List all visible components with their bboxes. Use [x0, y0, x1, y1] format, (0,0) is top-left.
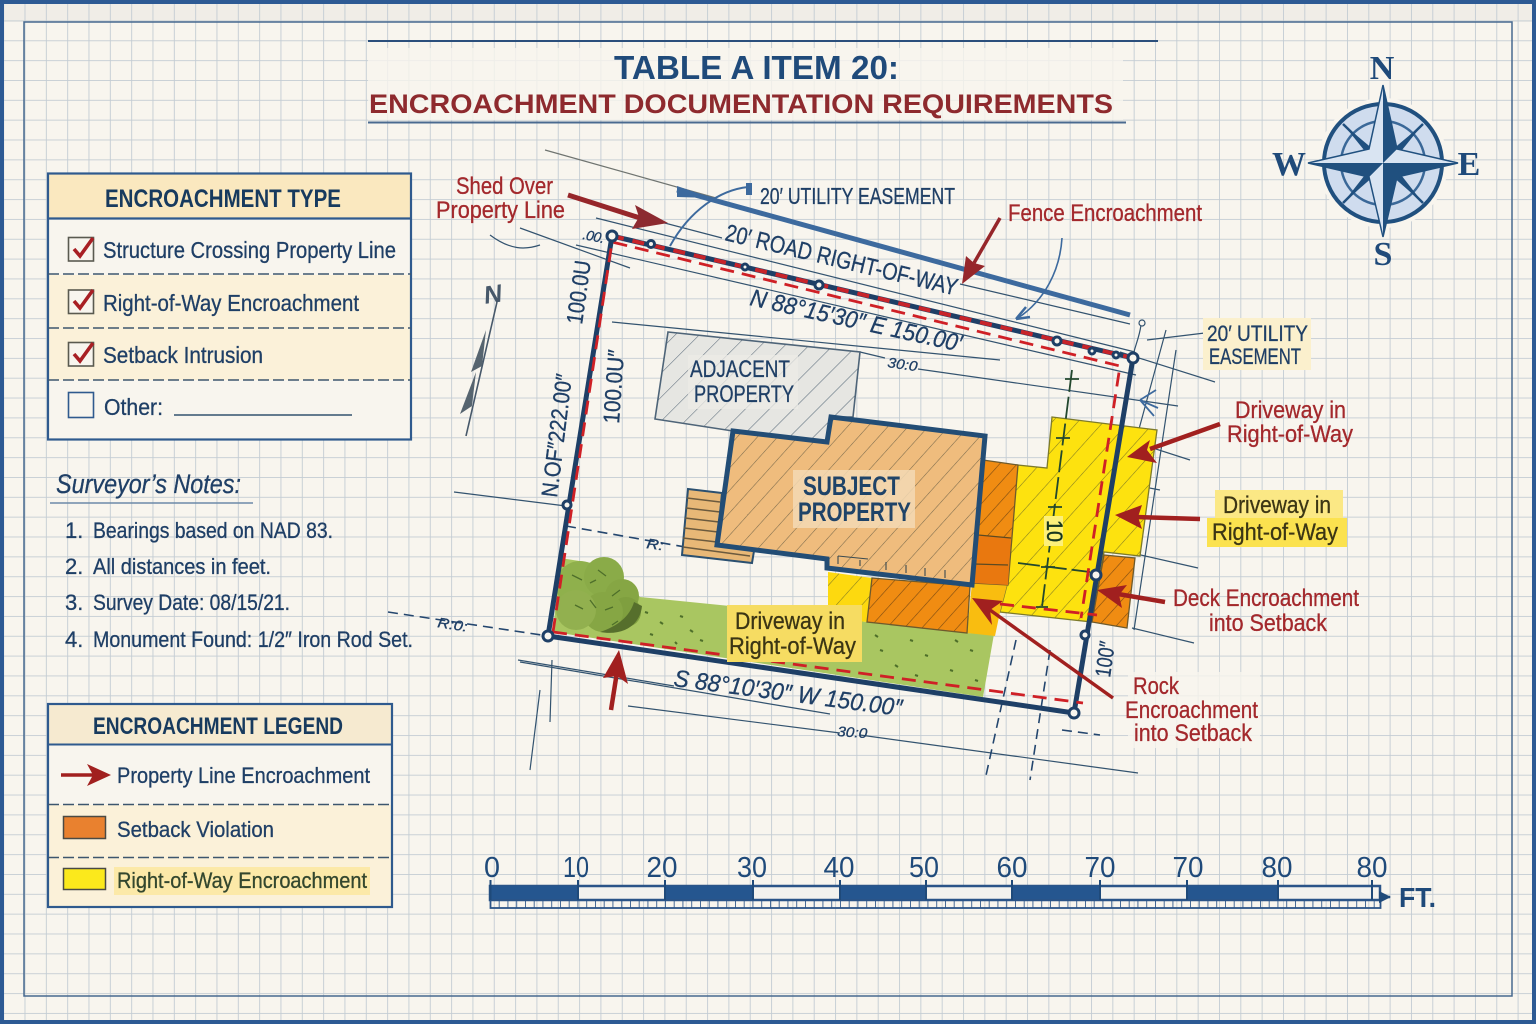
surveyor's notes: 1. [65, 518, 83, 543]
label: 30 top: 30:0 [887, 354, 919, 374]
label: R mid: R: [646, 535, 665, 553]
compass letters: W [1272, 146, 1306, 183]
legend: setback violation [64, 816, 274, 842]
utility easement band [670, 183, 1158, 416]
row: other [68, 392, 352, 420]
compass letters: E [1458, 146, 1480, 183]
compass letters: N [1370, 50, 1395, 87]
adjacent property: PROPERTY [694, 381, 794, 408]
callout: driveway in right-of-way lawn: Right-of-Way [729, 633, 856, 660]
row: structure crossing: Structure Crossing Property Line [103, 237, 396, 263]
scale numbers [484, 852, 1388, 884]
scale bar [484, 852, 1436, 913]
arrow: lawn boundary [603, 650, 628, 710]
dimension labels: 100.0U [561, 259, 596, 326]
callout: driveway in right-of-way yellow: Driveway in [1223, 492, 1331, 519]
callout: shed over property line [436, 173, 668, 229]
surveyor's notes: Monument Found: 1/2″ Iron Rod Set. [93, 627, 413, 652]
callout: driveway in right-of-way lawn: Driveway in [735, 608, 845, 635]
callout: rock encroachment: Encroachment [1125, 697, 1258, 724]
callout: deck encroachment: into Setback [1209, 610, 1328, 637]
dimension labels: 100.0U″ [598, 349, 629, 424]
surveyor's notes: Bearings based on NAD 83. [93, 518, 333, 543]
label: 00 dimension: .00. [581, 226, 606, 246]
dimension labels [536, 220, 1120, 722]
callout: rock encroachment: Rock [1133, 673, 1180, 700]
surveyor's notes: All distances in feet. [93, 554, 271, 579]
surveyor's notes: Survey Date: 08/15/21. [93, 590, 290, 615]
scale numbers: 30 [737, 852, 767, 884]
surveyor's notes: 2. [65, 554, 83, 579]
callout: deck encroachment [1097, 585, 1359, 637]
surveyor's notes: 3. [65, 590, 83, 615]
dimension labels: S 88°10′30″ W 150.00″ [672, 665, 905, 722]
monuments [543, 231, 1138, 718]
title: ENCROACHMENT DOCUMENTATION REQUIREMENTS [369, 89, 1113, 119]
legend: right-of-way [64, 867, 370, 895]
scale numbers: 10 [563, 852, 589, 884]
title [368, 41, 1158, 122]
surveyor's notes: Surveyor’s Notes: [56, 469, 241, 499]
callout: shed over property line: Shed Over [456, 173, 553, 200]
main star [1308, 85, 1458, 237]
title: TABLE A ITEM 20: [614, 49, 899, 86]
callout: driveway in right-of-way upper: Driveway in [1235, 397, 1346, 424]
easement label right: 20′ UTILITY [1207, 321, 1308, 346]
legend: setback violation: Setback Violation [117, 817, 274, 842]
orange setback zones [867, 460, 1135, 633]
easement label right [1203, 318, 1311, 370]
small north arrow: N [484, 279, 503, 310]
row: setback: Setback Intrusion [103, 342, 263, 368]
deck [682, 489, 754, 563]
label: 30 bottom: 30:0 [837, 723, 868, 741]
callout: deck encroachment: Deck Encroachment [1173, 585, 1359, 612]
compass letters [1272, 50, 1480, 273]
dimension line in driveway zone [1018, 370, 1090, 607]
dimension labels: 100″ [1090, 639, 1120, 679]
callout: shed over property line: Property Line [436, 197, 565, 224]
callout: driveway in right-of-way yellow [1115, 490, 1347, 547]
scale numbers: 20 [646, 852, 678, 884]
callout: rock encroachment [972, 598, 1260, 748]
heading: encroachment type: ENCROACHMENT TYPE [105, 185, 341, 213]
yellow right-of-way zones [828, 417, 1157, 636]
lawn [553, 558, 994, 697]
panel: encroachment legend [48, 704, 392, 907]
dimension labels: 10 [1042, 520, 1067, 542]
subject property: PROPERTY [798, 497, 911, 527]
subject property [717, 417, 985, 585]
scale numbers: 80 [1356, 852, 1388, 884]
subject property: SUBJECT [803, 471, 900, 501]
dimension labels: N 88°15′30″ E 150.00′ [748, 284, 966, 358]
surveyor's notes: 4. [65, 627, 83, 652]
callout: driveway in right-of-way yellow: Right-of-Way [1212, 519, 1338, 546]
scale numbers: 80 [1262, 852, 1292, 884]
scale numbers: 70 [1172, 852, 1204, 884]
callout: driveway in right-of-way upper [1127, 397, 1353, 463]
legend: right-of-way: Right-of-Way Encroachment [117, 868, 368, 893]
adjacent property [655, 332, 860, 442]
legend: property line arrow: Property Line Encroachment [117, 763, 371, 788]
survey drawing: context lines [388, 150, 1215, 780]
heading: legend: ENCROACHMENT LEGEND [93, 713, 343, 740]
scale numbers: 0 [484, 852, 500, 884]
callout: driveway in right-of-way lawn [727, 605, 862, 662]
small north arrow [460, 279, 503, 438]
callout: driveway in right-of-way upper: Right-of-Way [1227, 421, 1353, 448]
row: other: Other: [104, 394, 163, 420]
surveyor's notes [50, 469, 413, 652]
callout: fence encroachment: Fence Encroachment [1008, 200, 1202, 227]
tree [556, 557, 642, 633]
row: right-of-way: Right-of-Way Encroachment [103, 290, 360, 316]
diagonal points [1343, 124, 1423, 203]
dimension labels: 20′ ROAD RIGHT-OF-WAY [723, 220, 960, 301]
compass letters: S [1374, 236, 1392, 273]
panel: encroachment type [48, 174, 411, 440]
scale numbers: 70 [1084, 852, 1116, 884]
property boundary [543, 231, 1138, 718]
dimension labels: N.OF″222.00″ [536, 372, 577, 499]
easement label right: EASEMENT [1209, 344, 1301, 369]
label: R left: R:0: [437, 614, 469, 635]
callout: rock encroachment: into Setback [1134, 720, 1253, 747]
adjacent property: ADJACENT [690, 356, 790, 383]
scale numbers: 50 [909, 852, 939, 884]
scale numbers: 40 [824, 852, 854, 884]
compass rose [1272, 50, 1480, 273]
easement label top: 20′ UTILITY EASEMENT [760, 183, 955, 209]
scale unit: FT. [1399, 882, 1436, 913]
callout: fence encroachment [962, 200, 1202, 284]
scale numbers: 60 [996, 852, 1028, 884]
